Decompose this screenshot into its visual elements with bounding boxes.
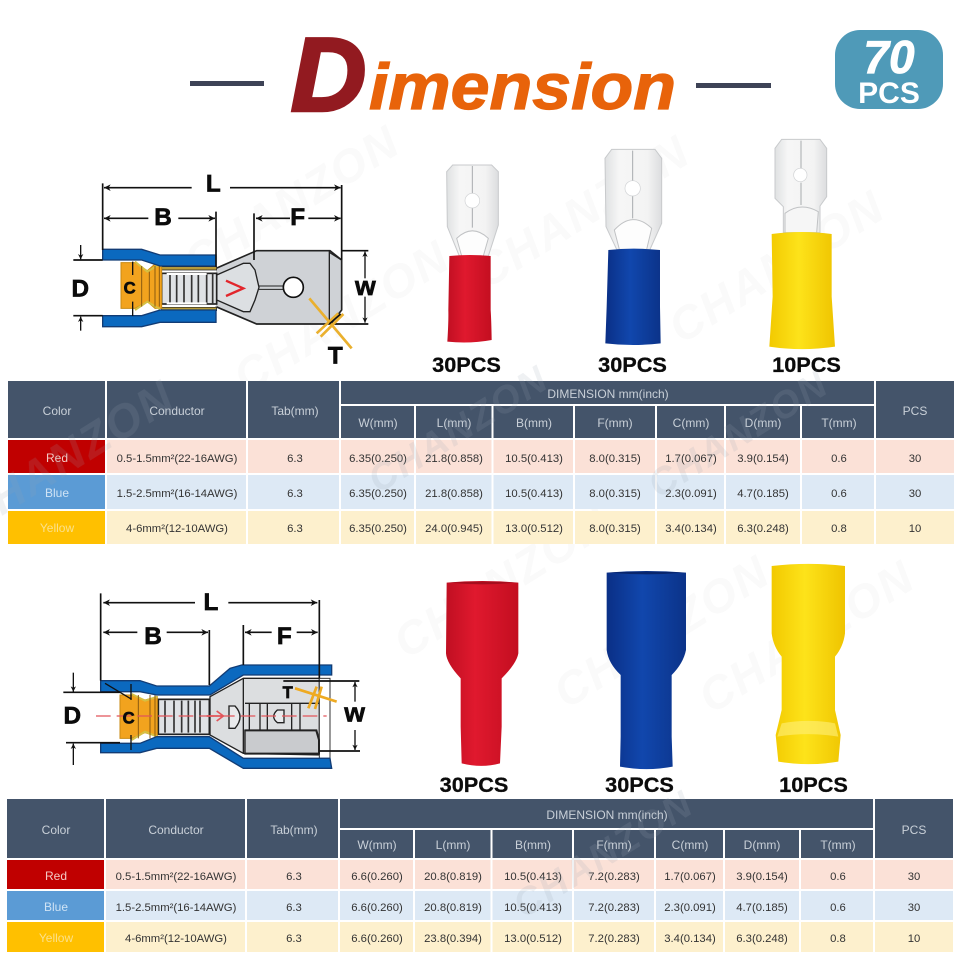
table header: PCS (903, 404, 927, 418)
table header: PCS (902, 823, 926, 837)
row: blue (45, 486, 921, 500)
label: 30PCS red male: 30PCS (432, 352, 501, 377)
row: red: 1.7(0.067) (664, 871, 716, 883)
table header: Color (43, 404, 71, 418)
label: 10PCS yellow female: 10PCS (779, 772, 848, 797)
row: blue: 0.6 (831, 488, 847, 500)
table header (43, 387, 927, 430)
row: red: 0.5-1.5mm²(22-16AWG) (116, 871, 237, 883)
diagram: female terminal dimensions: F (277, 623, 292, 650)
watermarks: CHANZON: CHANZON (464, 125, 699, 298)
row: red: 20.8(0.819) (424, 871, 482, 883)
row: blue: 4.7(0.185) (736, 902, 788, 914)
table header: F(mm) (597, 416, 633, 430)
row: red: 8.0(0.315) (589, 453, 641, 465)
row: blue: 4.7(0.185) (737, 488, 789, 500)
row: red: 6.6(0.260) (351, 871, 403, 883)
watermarks: CHANZON: CHANZON (659, 180, 894, 353)
row: yellow: 13.0(0.512) (504, 933, 562, 945)
row: red: 0.5-1.5mm²(22-16AWG) (117, 453, 238, 465)
badge: 70 PCS: 70 (863, 31, 915, 83)
diagram: female terminal dimensions: T (283, 683, 293, 702)
label: 10PCS yellow male: 10PCS (772, 352, 841, 377)
row: blue: 30 (909, 488, 921, 500)
table header: L(mm) (437, 416, 471, 430)
photo: red male terminal (447, 165, 498, 343)
table header: T(mm) (821, 416, 857, 430)
watermarks: CHANZON (174, 115, 924, 723)
table header: T(mm) (820, 838, 856, 852)
table: male terminal specifications (0, 358, 954, 544)
row: yellow: 3.4(0.134) (664, 933, 716, 945)
table watermarks: CHANZON (361, 358, 556, 502)
row: blue (44, 900, 920, 914)
label: 30PCS blue male: 30PCS (598, 352, 667, 377)
diagram: female terminal dimensions: w (343, 698, 365, 728)
diagram: female terminal dimensions: C (123, 708, 135, 727)
label: 30PCS blue female: 30PCS (605, 772, 674, 797)
row: blue: 6.3 (287, 488, 303, 500)
row: blue: Blue (45, 486, 69, 500)
row: blue: 6.6(0.260) (351, 902, 403, 914)
row: yellow: 10 (908, 933, 920, 945)
row: yellow: 3.4(0.134) (665, 523, 717, 535)
table header: Tab(mm) (271, 404, 319, 418)
row: yellow: 6.35(0.250) (349, 523, 407, 535)
row: yellow: 23.8(0.394) (424, 933, 482, 945)
diagram: male terminal dimensions: L (206, 171, 221, 198)
title: Dimension (190, 18, 771, 134)
row: yellow: 0.8 (830, 933, 846, 945)
row: yellow: 4-6mm²(12-10AWG) (126, 523, 228, 535)
row: blue: 6.35(0.250) (349, 488, 407, 500)
row: blue: 6.3 (286, 902, 302, 914)
photo: red female terminal (446, 581, 518, 766)
row: red: 0.6 (831, 453, 847, 465)
row: red: 21.8(0.858) (425, 453, 483, 465)
diagram: male terminal dimensions: C (124, 278, 136, 297)
row: yellow (39, 931, 920, 945)
badge: 70 PCS (835, 30, 943, 110)
row: yellow: 6.3(0.248) (736, 933, 788, 945)
table header: B(mm) (516, 416, 552, 430)
title: Dimension: D (291, 18, 366, 134)
row: yellow: 8.0(0.315) (589, 523, 641, 535)
row: red: 6.3 (287, 453, 303, 465)
watermarks: CHANZON: CHANZON (689, 550, 924, 723)
table header (42, 808, 926, 852)
table header: F(mm) (596, 838, 632, 852)
row: yellow: 10 (909, 523, 921, 535)
row: red: 6.35(0.250) (349, 453, 407, 465)
row: blue: 0.6 (830, 902, 846, 914)
table header: Conductor (149, 404, 205, 418)
row: blue: Blue (44, 900, 68, 914)
diagram: male terminal dimensions: w (354, 271, 376, 301)
row: blue: 2.3(0.091) (665, 488, 717, 500)
row: red: 10.5(0.413) (505, 453, 563, 465)
row: blue: 1.5-2.5mm²(16-14AWG) (117, 488, 238, 500)
row: yellow: 6.3 (286, 933, 302, 945)
table header: C(mm) (673, 416, 709, 430)
row: blue: 10.5(0.413) (504, 902, 562, 914)
row: blue: 1.5-2.5mm²(16-14AWG) (116, 902, 237, 914)
diagram: male terminal dimensions: B (154, 204, 172, 231)
diagram: female terminal dimensions (63, 589, 365, 768)
table: female terminal specifications (7, 783, 953, 952)
row: red: 30 (908, 871, 920, 883)
table header: Color (42, 823, 70, 837)
row: blue: 8.0(0.315) (589, 488, 641, 500)
row: blue: 21.8(0.858) (425, 488, 483, 500)
row: red (46, 451, 921, 465)
diagram: male terminal dimensions (72, 171, 376, 369)
row: yellow: Yellow (39, 931, 73, 945)
row: red: Red (45, 869, 67, 883)
row: yellow: 7.2(0.283) (588, 933, 640, 945)
diagram: female terminal dimensions: D (64, 702, 81, 729)
table header: Tab(mm) (270, 823, 318, 837)
table watermark: CHANZON (506, 783, 701, 927)
table header: W(mm) (358, 416, 398, 430)
table header: D(mm) (744, 838, 780, 852)
table header: D(mm) (745, 416, 781, 430)
table header: DIMENSION mm(inch) (546, 808, 668, 822)
row: red: 3.9(0.154) (736, 871, 788, 883)
row: red: 1.7(0.067) (665, 453, 717, 465)
diagram: female terminal dimensions: L (204, 589, 219, 616)
diagram: male terminal dimensions: D (72, 276, 89, 303)
row: yellow: 0.8 (831, 523, 847, 535)
table watermarks (0, 358, 836, 543)
table watermarks: CHANZON (641, 363, 836, 507)
table header: C(mm) (672, 838, 708, 852)
row: red: 7.2(0.283) (588, 871, 640, 883)
table header: W(mm) (357, 838, 397, 852)
table header: L(mm) (436, 838, 470, 852)
row: yellow: 6.6(0.260) (351, 933, 403, 945)
row: yellow: 6.3(0.248) (737, 523, 789, 535)
row: blue: 30 (908, 902, 920, 914)
watermarks: CHANZON: CHANZON (224, 230, 459, 403)
diagram: male terminal dimensions: T (328, 342, 343, 369)
photo: blue female terminal (607, 571, 686, 769)
row: red: 6.3 (286, 871, 302, 883)
row: red: Red (46, 451, 68, 465)
photo: yellow female terminal (772, 564, 845, 764)
table header: Conductor (148, 823, 204, 837)
photo: blue male terminal (605, 149, 662, 345)
badge: 70 PCS: PCS (858, 77, 920, 110)
table header: B(mm) (515, 838, 551, 852)
row: red: 3.9(0.154) (737, 453, 789, 465)
diagram: female terminal dimensions: B (144, 623, 162, 650)
watermarks: CHANZON: CHANZON (384, 495, 619, 668)
watermarks: CHANZON: CHANZON (544, 545, 779, 718)
watermarks: CHANZON: CHANZON (174, 115, 409, 288)
row: yellow: 6.3 (287, 523, 303, 535)
diagram: male terminal dimensions: F (290, 204, 305, 231)
row: blue: 7.2(0.283) (588, 902, 640, 914)
row: blue: 10.5(0.413) (505, 488, 563, 500)
row: blue: 2.3(0.091) (664, 902, 716, 914)
row: red: 10.5(0.413) (504, 871, 562, 883)
row: red (45, 869, 920, 883)
label: 30PCS red female: 30PCS (440, 772, 508, 797)
row: red: 0.6 (830, 871, 846, 883)
row: yellow: Yellow (40, 521, 74, 535)
table header: DIMENSION mm(inch) (547, 387, 669, 401)
title: Dimension: imension (369, 50, 676, 123)
row: yellow (40, 521, 921, 535)
row: blue: 20.8(0.819) (424, 902, 482, 914)
row: red: 30 (909, 453, 921, 465)
row: yellow: 4-6mm²(12-10AWG) (125, 933, 227, 945)
row: yellow: 13.0(0.512) (505, 523, 563, 535)
row: yellow: 24.0(0.945) (425, 523, 483, 535)
photo: yellow male terminal (769, 139, 835, 349)
